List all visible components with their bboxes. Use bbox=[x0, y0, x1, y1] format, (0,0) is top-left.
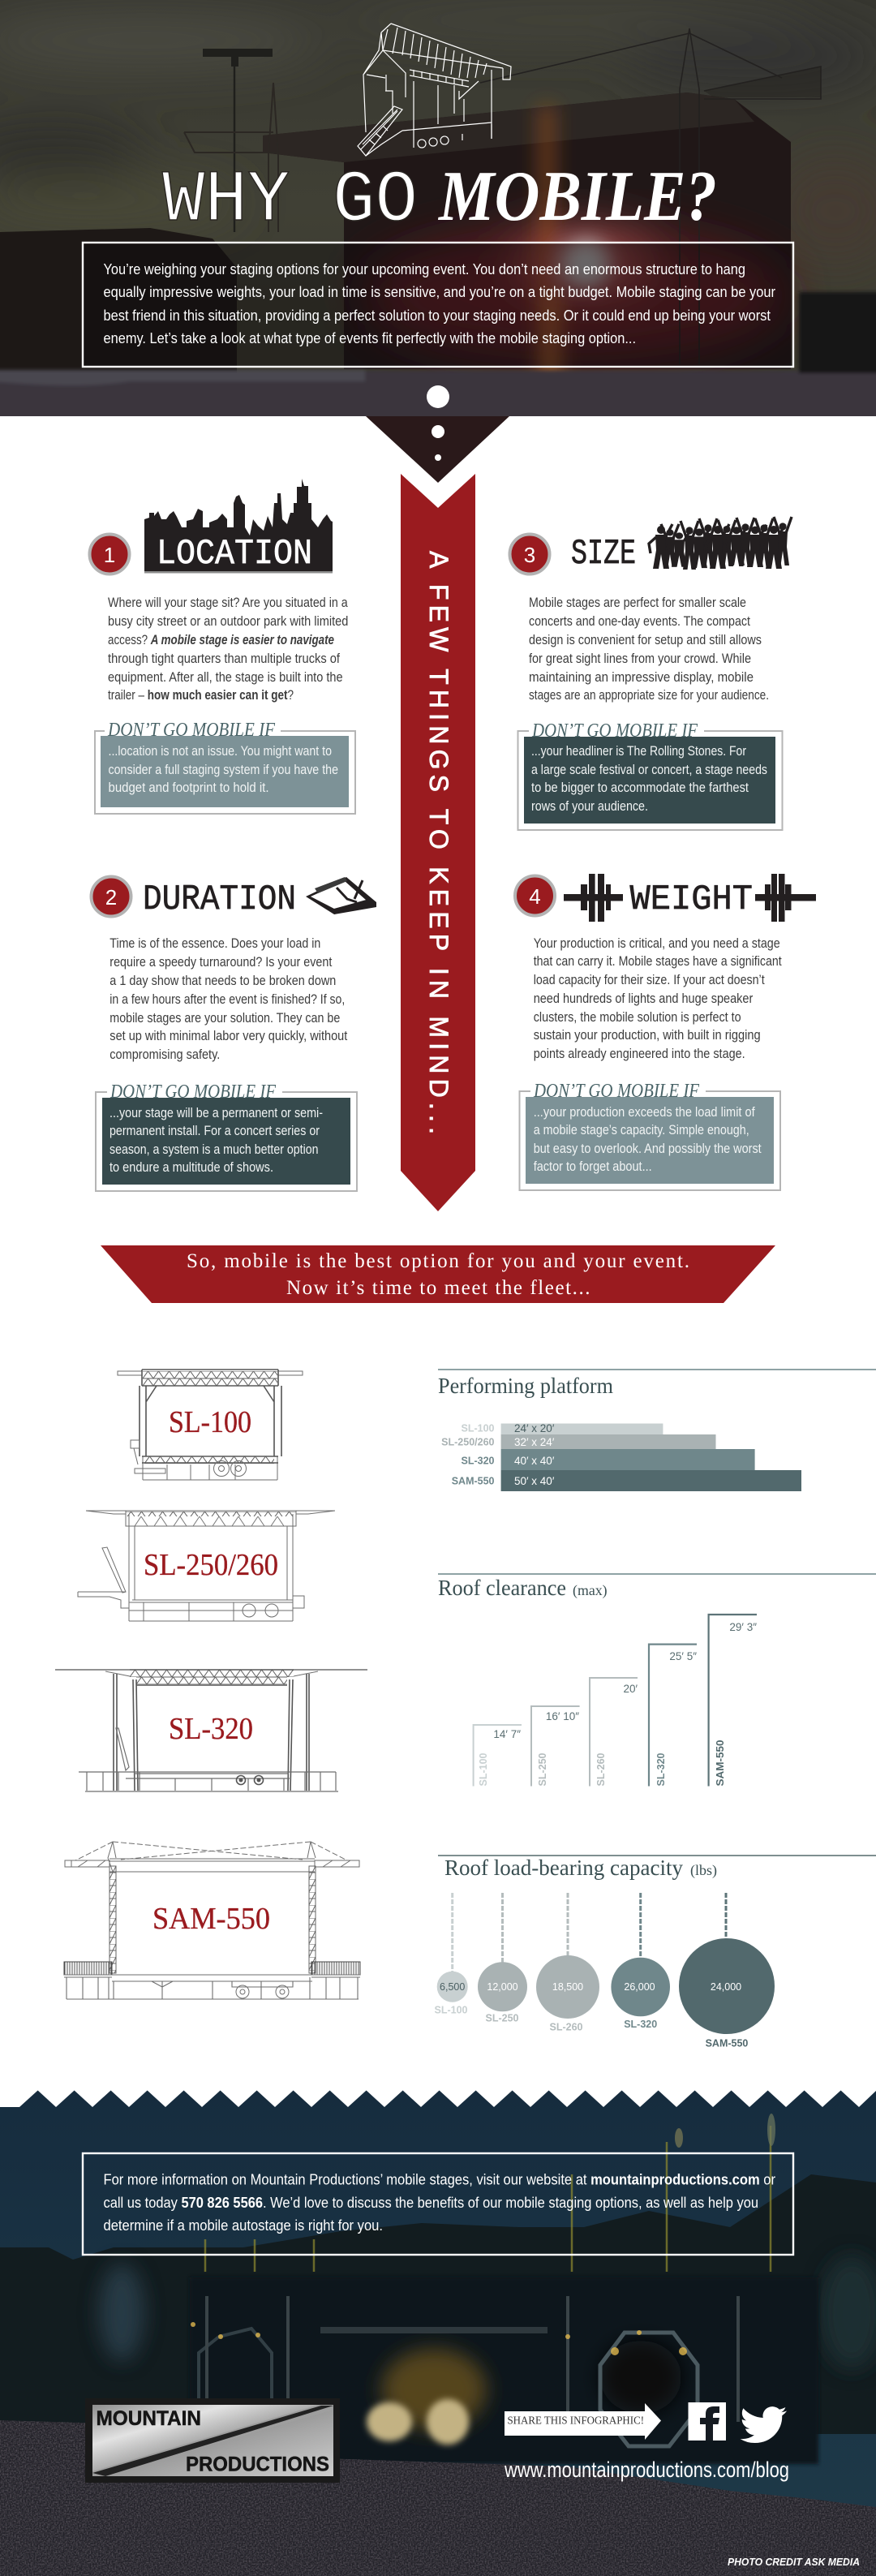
body text: set up with minimal labor very quickly, without bbox=[110, 1029, 348, 1043]
body text bbox=[534, 936, 782, 1061]
marker: SL-320: SL-320 bbox=[655, 1752, 667, 1787]
body text: through tight quarters than multiple trucks of bbox=[108, 652, 340, 666]
body text: Your production is critical, and you need a stage bbox=[534, 936, 780, 951]
wrecking ball: SAM-550: SAM-550 bbox=[706, 2038, 748, 2049]
chart: performing platform: Performing platform bbox=[438, 1374, 613, 1398]
chart: roof load-bearing capacity: (lbs) bbox=[690, 1862, 717, 1879]
stage drawing: SL-320 bbox=[55, 1670, 367, 1791]
body text: Where will your stage sit? Are you situated in a bbox=[108, 596, 348, 610]
stage drawing: SL-250/260: SL-250/260 bbox=[144, 1548, 278, 1582]
panel: duration bbox=[91, 876, 376, 1191]
title bbox=[162, 157, 717, 243]
marker: SL-260: SL-260 bbox=[595, 1752, 607, 1787]
callout: don't go mobile if: to endure a multitude of shows. bbox=[110, 1160, 273, 1175]
marker: SAM-550: 29′ 3″ bbox=[729, 1621, 757, 1633]
body text bbox=[529, 596, 769, 703]
bar: SL-100 bbox=[461, 1422, 663, 1434]
logo: mountain productions: PRODUCTIONS bbox=[186, 2453, 329, 2476]
body text: trailer – how much easier can it get? bbox=[108, 688, 294, 703]
wrecking ball: SAM-550: 24,000 bbox=[711, 1981, 741, 1993]
stage drawing: SL-250/260 bbox=[78, 1511, 335, 1621]
bar: SAM-550 bbox=[452, 1470, 801, 1491]
hero background photo bbox=[0, 0, 876, 428]
wrecking ball: SL-100: SL-100 bbox=[435, 2005, 468, 2016]
icon: left barbell bbox=[564, 874, 623, 922]
dots bbox=[427, 385, 449, 461]
body text bbox=[108, 596, 348, 703]
wrecking ball: SL-260: 18,500 bbox=[552, 1981, 583, 1993]
callout: don't go mobile if bbox=[517, 720, 782, 830]
footer text box: determine if a mobile autostage is right for you. bbox=[104, 2217, 383, 2234]
callout: don't go mobile if: consider a full staging system if you have the bbox=[109, 763, 338, 777]
panel: size bbox=[509, 517, 792, 830]
bar: SL-250/260: 32′ x 24′ bbox=[514, 1436, 555, 1448]
callout: don't go mobile if: ...location is not an issue. You might want to bbox=[109, 744, 332, 759]
ribbon: a few things to keep in mind bbox=[401, 474, 475, 1211]
wrecking ball: SL-250: SL-250 bbox=[485, 2013, 519, 2024]
chart: roof load-bearing capacity: Roof load-bearing capacity bbox=[444, 1856, 683, 1880]
marker: SAM-550 bbox=[709, 1615, 757, 1787]
body text: mobile stages are your solution. They can be bbox=[110, 1011, 340, 1026]
callout: don't go mobile if: permanent install. For a concert series or bbox=[110, 1124, 320, 1138]
icon: skyline heading: LOCATION bbox=[157, 534, 312, 574]
number badge 4: 4 bbox=[529, 884, 541, 909]
body text: compromising safety. bbox=[110, 1047, 220, 1062]
intro text box: equally impressive weights, your load in time is sensitive, and you’re on a tight budget. Mobile staging can be your bbox=[104, 283, 775, 300]
body text: that can carry it. Mobile stages have a significant bbox=[534, 954, 782, 969]
marker: SL-260: 20′ bbox=[623, 1683, 638, 1695]
logo: mountain productions bbox=[85, 2398, 340, 2483]
body text: a 1 day show that needs to be broken down bbox=[110, 974, 336, 988]
stage drawing: SL-100 bbox=[118, 1370, 303, 1480]
marker: SL-100: 14′ 7″ bbox=[493, 1728, 521, 1740]
callout: don't go mobile if bbox=[95, 720, 355, 814]
footer text box bbox=[83, 2153, 793, 2255]
number badge 3 bbox=[509, 534, 550, 574]
banner: meet the fleet: So, mobile is the best option for you and your event. bbox=[187, 1250, 689, 1272]
icon: facebook bbox=[688, 2402, 726, 2441]
callout: don't go mobile if: budget and footprint to hold it. bbox=[109, 781, 269, 795]
callout: don't go mobile if: DON’T GO MOBILE IF bbox=[533, 1081, 699, 1102]
intro text box: You’re weighing your staging options for your upcoming event. You don’t need an enormous structure to hang bbox=[104, 260, 745, 277]
wrecking ball: SL-320 bbox=[611, 1893, 670, 2030]
heading: weight: WEIGHT bbox=[629, 879, 753, 920]
callout: don't go mobile if: DON’T GO MOBILE IF bbox=[110, 1082, 276, 1103]
wrecking ball: SL-250: 12,000 bbox=[487, 1981, 518, 1993]
wrecking ball: SAM-550 bbox=[679, 1893, 775, 2049]
marker: SAM-550: SAM-550 bbox=[715, 1740, 726, 1787]
bar: SL-320 bbox=[461, 1449, 755, 1470]
number badge 3: 3 bbox=[524, 543, 535, 567]
callout: don't go mobile if: ...your production exceeds the load limit of bbox=[534, 1105, 755, 1120]
bar: SL-100: SL-100 bbox=[461, 1423, 495, 1434]
bar: SL-250/260 bbox=[441, 1434, 715, 1449]
callout: don't go mobile if bbox=[96, 1082, 357, 1191]
title: MOBILE? bbox=[437, 157, 717, 236]
intro text box: enemy. Let’s take a look at what type of events fit perfectly with the mobile staging option... bbox=[104, 329, 636, 346]
body text: stages are an appropriate size for your audience. bbox=[529, 688, 769, 703]
body text: concerts and one-day events. The compact bbox=[529, 614, 750, 629]
body text: design is convenient for setup and still allows bbox=[529, 633, 762, 647]
bar: SAM-550: SAM-550 bbox=[452, 1475, 495, 1486]
wrecking ball: SL-260 bbox=[536, 1893, 599, 2033]
body text: for great sight lines from your crowd. While bbox=[529, 652, 751, 666]
body text: access? A mobile stage is easier to navigate bbox=[108, 633, 334, 647]
marker: SL-320: 25′ 5″ bbox=[669, 1650, 697, 1662]
body text: Time is of the essence. Does your load in bbox=[110, 936, 320, 951]
marker: SL-260 bbox=[590, 1678, 638, 1787]
marker: SL-320 bbox=[649, 1645, 697, 1787]
stage drawing: SAM-550: SAM-550 bbox=[152, 1902, 270, 1936]
callout: don't go mobile if: DON’T GO MOBILE IF bbox=[107, 720, 275, 741]
icon: crowd silhouette bbox=[649, 517, 792, 570]
callout: don't go mobile if: but easy to overlook. And possibly the worst bbox=[534, 1142, 762, 1156]
callout: don't go mobile if: a mobile stage’s capacity. Simple enough, bbox=[534, 1123, 749, 1137]
number badge 2 bbox=[91, 876, 131, 917]
bar: SL-250/260: SL-250/260 bbox=[441, 1437, 495, 1448]
callout: don't go mobile if: season, a system is a much better option bbox=[110, 1142, 318, 1157]
body text bbox=[110, 936, 348, 1062]
chart: roof clearance bbox=[438, 1573, 876, 1787]
callout: don't go mobile if: to be bigger to accommodate the farthest bbox=[531, 781, 749, 795]
number badge 1 bbox=[89, 534, 130, 574]
body text: busy city street or an outdoor park with limited bbox=[108, 614, 348, 629]
marker: SL-100: SL-100 bbox=[478, 1752, 489, 1787]
intro text box: best friend in this situation, providing a perfect solution to your staging needs. Or it could end up being your worst bbox=[104, 307, 771, 324]
chart: roof load-bearing capacity bbox=[435, 1855, 876, 2049]
footer text box: For more information on Mountain Productions’ mobile stages, visit our website at mountainproductions.com or bbox=[104, 2171, 775, 2187]
wrecking ball: SL-320: 26,000 bbox=[624, 1981, 655, 1993]
hero triangle pointer bbox=[366, 416, 509, 483]
body text: sustain your production, with built in rigging bbox=[534, 1028, 761, 1043]
intro text box bbox=[83, 243, 793, 367]
footer text box: call us today 570 826 5566. We’d love to discuss the benefits of our mobile staging options, as well as help you bbox=[104, 2194, 758, 2211]
callout: don't go mobile if bbox=[519, 1081, 780, 1190]
wrecking ball: SL-100 bbox=[435, 1893, 468, 2016]
stage drawing: SL-320: SL-320 bbox=[169, 1712, 253, 1746]
bar: SL-320: 40′ x 40′ bbox=[514, 1455, 555, 1467]
wrecking ball: SL-260: SL-260 bbox=[550, 2022, 583, 2033]
body text: load capacity for their size. If your act doesn’t bbox=[534, 973, 765, 987]
number badge 1: 1 bbox=[104, 543, 115, 567]
footer background photo bbox=[0, 2085, 876, 2576]
icon: skyline heading bbox=[144, 479, 333, 574]
heading: duration: DURATION bbox=[143, 879, 296, 920]
body text: need hundreds of lights and huge speaker bbox=[534, 991, 754, 1006]
body text: require a speedy turnaround? Is your event bbox=[110, 955, 333, 970]
chart: performing platform bbox=[438, 1369, 876, 1491]
callout: don't go mobile if: rows of your audience. bbox=[531, 799, 648, 814]
bar: SL-320: SL-320 bbox=[461, 1456, 495, 1467]
number badge 2: 2 bbox=[105, 885, 117, 910]
title: WHY GO bbox=[162, 160, 418, 243]
icon: stage line drawing bbox=[358, 24, 511, 156]
marker: SL-250 bbox=[531, 1706, 580, 1787]
wrecking ball: SL-100: 6,500 bbox=[440, 1981, 465, 1993]
arrow: share this infographic: SHARE THIS INFOGRAPHIC! bbox=[508, 2415, 644, 2428]
callout: don't go mobile if: ...your stage will be a permanent or semi- bbox=[110, 1106, 323, 1120]
body text: Mobile stages are perfect for smaller scale bbox=[529, 596, 746, 610]
heading: size: SIZE bbox=[571, 534, 636, 574]
stage drawing: SAM-550 bbox=[64, 1842, 360, 1999]
callout: don't go mobile if: a large scale festival or concert, a stage needs bbox=[531, 763, 767, 777]
wrecking ball: SL-320: SL-320 bbox=[624, 2019, 657, 2030]
stage drawing: SL-100: SL-100 bbox=[169, 1405, 251, 1439]
chart: roof clearance: Roof clearance bbox=[438, 1576, 566, 1600]
callout: don't go mobile if: factor to forget about... bbox=[534, 1159, 652, 1174]
chart: roof clearance: (max) bbox=[573, 1582, 608, 1599]
panel: location bbox=[89, 479, 355, 814]
logo: mountain productions: MOUNTAIN bbox=[96, 2407, 201, 2430]
body text: equipment. After all, the stage is built into the bbox=[108, 670, 343, 685]
body text: points already engineered into the stage. bbox=[534, 1047, 745, 1061]
arrow: share this infographic bbox=[505, 2403, 661, 2440]
wrecking ball: SL-250 bbox=[478, 1893, 527, 2024]
bar: SAM-550: 50′ x 40′ bbox=[514, 1475, 555, 1487]
icon: twitter bbox=[740, 2406, 787, 2443]
icon: calendar book bbox=[306, 877, 376, 914]
panel: weight bbox=[515, 874, 816, 1190]
body text: in a few hours after the event is finished? If so, bbox=[110, 992, 345, 1007]
callout: don't go mobile if: ...your headliner is The Rolling Stones. For bbox=[531, 744, 746, 759]
icon: right barbell bbox=[755, 874, 816, 922]
photo credit: PHOTO CREDIT ASK MEDIA bbox=[728, 2557, 860, 2568]
number badge 4 bbox=[515, 876, 555, 915]
banner: meet the fleet: Now it’s time to meet the fleet... bbox=[286, 1277, 590, 1299]
bar: SL-100: 24′ x 20′ bbox=[514, 1422, 555, 1434]
marker: SL-250: 16′ 10″ bbox=[546, 1710, 579, 1722]
banner: meet the fleet bbox=[101, 1245, 775, 1303]
marker: SL-250: SL-250 bbox=[537, 1752, 548, 1787]
body text: maintaining an impressive display, mobile bbox=[529, 670, 754, 685]
callout: don't go mobile if: DON’T GO MOBILE IF bbox=[531, 720, 698, 742]
marker: SL-100 bbox=[474, 1725, 522, 1787]
ribbon: a few things to keep in mind: A FEW THINGS TO KEEP IN MIND... bbox=[424, 551, 453, 1134]
body text: clusters, the mobile solution is perfect to bbox=[534, 1010, 741, 1025]
website link: www.mountainproductions.com/blog bbox=[504, 2458, 789, 2482]
